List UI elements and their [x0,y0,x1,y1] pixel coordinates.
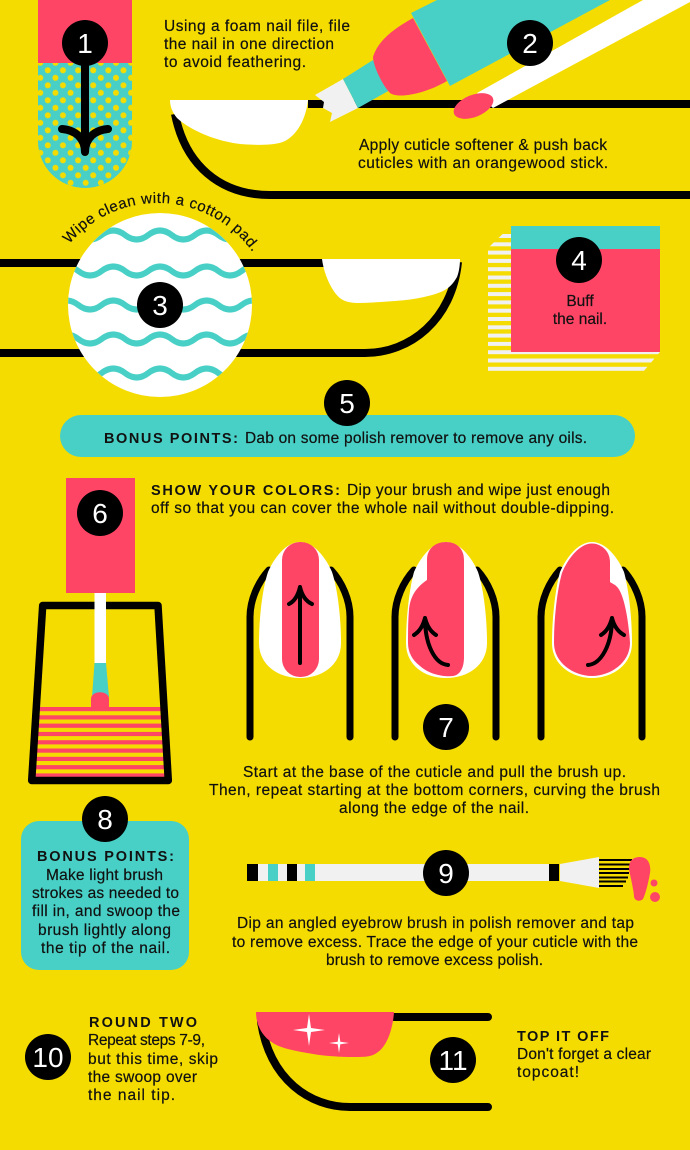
icon: buffer block [511,226,660,352]
icon: polish liquid stripes [30,707,170,778]
panel: step 3 wipe clean [0,192,462,397]
text: step 10: ROUND TWO [89,1015,197,1031]
text: step 5: BONUS POINTS: [104,431,238,447]
text: step 10: the swoop over [88,1069,197,1086]
text: step 1: the nail in one direction [164,36,334,53]
text: step 6: Dip your brush and wipe just enough [347,482,610,499]
nail stroke 1 [250,542,350,737]
finger outline [175,104,690,195]
nail [170,100,308,145]
text: step 10 [88,1015,218,1104]
nail [322,259,460,303]
nail stroke 3 [541,542,642,737]
icon: cuticle softener tube [315,0,610,122]
number 6 [77,490,123,536]
number 10: 10 [32,1042,64,1073]
panel: step 2 push back cuticles [170,0,690,195]
text: step 4 [553,293,607,328]
number 8 [82,796,128,842]
text: step 1 [164,18,350,71]
icon: bottle cap [66,478,135,593]
panel: step 8 bonus points [21,796,189,970]
text: step 8: brush lightly along [38,922,171,939]
text: step 4: the nail. [553,311,607,328]
icon: sparkles [293,1014,349,1053]
number 2: 2 [522,28,538,59]
text: step 8: strokes as needed to [32,885,179,902]
text: step 6 [151,482,614,517]
number 3: 3 [152,290,168,321]
number 11: 11 [438,1045,468,1076]
number 8: 8 [97,804,113,835]
number 7: 7 [438,712,454,743]
number 9: 9 [438,858,454,889]
text: step 7 [209,764,660,817]
text: step 7: along the edge of the nail. [339,800,529,817]
panel: step 11 top coat [256,1012,651,1107]
panel: step 4 buff [488,226,660,371]
text: step 10: but this time, skip [88,1051,218,1068]
text: step 8: BONUS POINTS: [37,849,174,865]
text: step 1: to avoid feathering. [164,54,306,71]
panel: step 5 bonus points [60,380,635,457]
icon: brush [91,593,109,708]
text: step 1: Using a foam nail file, file [164,18,350,35]
text: step 6: SHOW YOUR COLORS: [151,483,340,499]
number 5 [324,380,370,426]
nail stroke 2 [395,542,496,737]
icon: angled brush [247,857,632,888]
text: step 11: TOP IT OFF [517,1029,609,1045]
number 1 [62,20,108,66]
text: step 11: Don't forget a clear [517,1046,651,1063]
text: step 10: the nail tip. [88,1087,175,1104]
number 5: 5 [339,388,355,419]
text: step 8 [32,849,180,957]
number 6: 6 [92,498,108,529]
panel: step 9 eyebrow brush [232,850,660,969]
text: step 7: Start at the base of the cuticle and pull the brush up. [243,764,626,781]
panel: step 10 round two [25,1015,218,1104]
number 1: 1 [77,28,93,59]
number 10 [25,1034,71,1080]
card [21,821,189,970]
text: step 9 [232,915,638,969]
icon: bottle outline [32,606,168,780]
text: step 2 [358,137,608,172]
panel: step 7 three strokes [209,542,660,817]
text: step 2: cuticles with an orangewood stick. [358,155,608,172]
text: step 6: off so that you can cover the whole nail without double-dipping. [151,500,614,517]
text: step 5: Dab on some polish remover to remove any oils. [245,430,587,447]
number 9 [423,850,469,896]
text: curved wipe clean: Wipe clean with a cotton pad. [62,192,258,252]
text: step 7: Then, repeat starting at the bottom corners, curving the brush [209,782,660,799]
text: step 8: Make light brush [46,867,163,884]
text: step 9: brush to remove excess polish. [326,952,543,969]
icon: orangewood stick [450,0,690,124]
panel: step 6 polish bottle [30,478,614,780]
painted nail [256,1012,394,1057]
number 4 [556,237,602,283]
text: step 9: Dip an angled eyebrow brush in polish remover and tap [237,915,634,932]
pill [60,415,635,457]
number 4: 4 [571,245,587,276]
number 11 [430,1037,476,1083]
number 7 [423,704,469,750]
text: step 4: Buff [566,293,594,310]
text: step 8: the tip of the nail. [41,940,170,957]
finger outline [261,1017,488,1107]
text: step 10: Repeat steps 7-9, [88,1032,205,1049]
icon: polish blob [629,857,660,902]
text: step 11 [517,1029,651,1081]
text: step 8: fill in, and swoop the [32,903,180,920]
icon: cotton pad [68,213,252,397]
arrow: filing direction [62,50,108,152]
number 2 [507,20,553,66]
icon: nail file [38,0,132,188]
icon: buffer stripes [488,234,660,371]
text: step 2: Apply cuticle softener & push back [359,137,607,154]
finger outline [0,262,458,353]
text: step 9: to remove excess. Trace the edge of your cuticle with the [232,934,638,951]
panel: step 1 file the nail [38,0,350,188]
number 3 [137,282,183,328]
text: step 11: topcoat! [517,1064,579,1081]
